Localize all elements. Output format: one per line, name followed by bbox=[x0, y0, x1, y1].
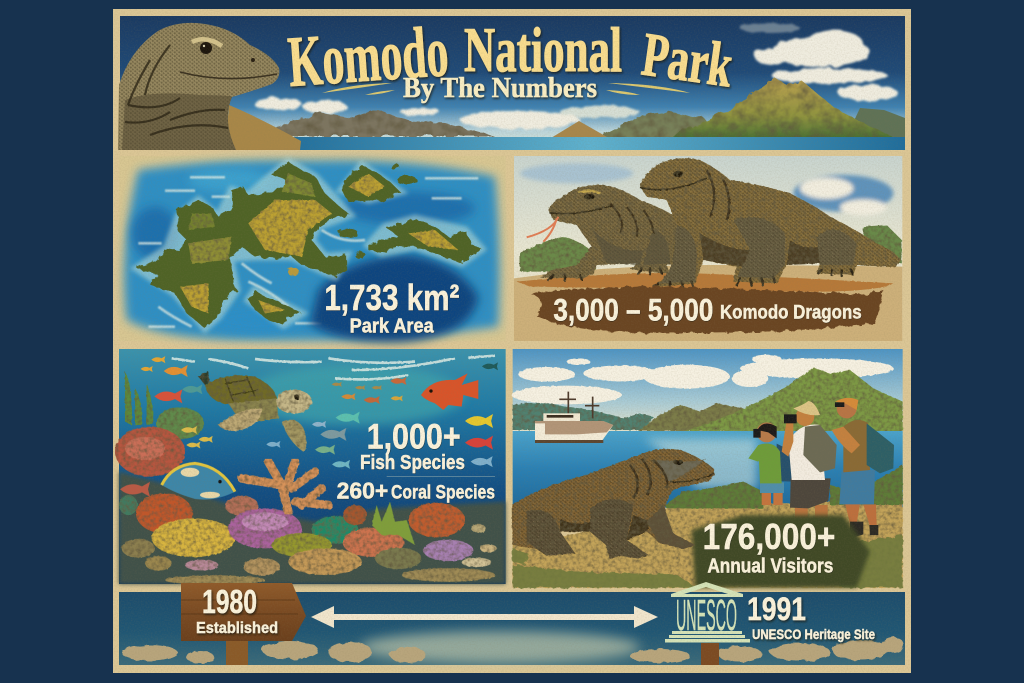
panel: marine life bbox=[115, 349, 506, 585]
sky tint and cloud bbox=[520, 163, 893, 215]
people group bbox=[748, 398, 894, 538]
green coral bbox=[156, 407, 204, 439]
green sea grass bbox=[372, 502, 415, 545]
small dragon bbox=[540, 184, 687, 278]
reef fish school bbox=[120, 356, 498, 497]
panel: timeline footer: UNESCO bbox=[676, 591, 737, 640]
tan rocks bbox=[288, 548, 362, 575]
header islet bbox=[546, 121, 614, 141]
orange right coral bbox=[408, 503, 465, 537]
ship bbox=[535, 392, 613, 443]
small orange coral bbox=[343, 505, 367, 525]
header tan headland bbox=[225, 105, 301, 150]
unesco post bbox=[701, 643, 719, 665]
large orange fish bbox=[421, 373, 478, 410]
title: National bbox=[464, 14, 622, 85]
left hills bbox=[513, 403, 653, 432]
title: Komodo bbox=[286, 11, 451, 102]
unesco temple icon bbox=[665, 582, 750, 642]
year 1980: 1980 bbox=[202, 583, 257, 620]
purple coral bbox=[228, 508, 302, 548]
lavender coral bbox=[423, 540, 473, 561]
coral species value: 260+ bbox=[337, 478, 388, 504]
salmon coral bbox=[343, 528, 404, 557]
large dragon limbs bbox=[660, 217, 857, 283]
band light patch bbox=[360, 631, 640, 663]
visitor count: 176,000+ bbox=[703, 516, 835, 557]
islets bbox=[288, 164, 417, 276]
dark belly bbox=[700, 233, 820, 267]
ground bbox=[513, 498, 903, 588]
main island bbox=[137, 162, 350, 328]
shrubs bbox=[665, 465, 903, 508]
header big mountain bbox=[662, 78, 903, 140]
right shrubs bbox=[863, 225, 902, 263]
right hills bbox=[638, 403, 763, 431]
visitor label: Annual Visitors bbox=[707, 556, 833, 578]
branching coral bbox=[242, 462, 328, 512]
panel: annual visitors bbox=[512, 349, 903, 588]
island highlights bbox=[180, 173, 458, 313]
foreground dragon limbs bbox=[560, 515, 650, 540]
header far right ridge bbox=[845, 108, 905, 140]
yellow coral bbox=[152, 518, 235, 557]
title: Park bbox=[638, 21, 737, 100]
reef water bbox=[119, 349, 506, 584]
surface ripples bbox=[172, 356, 495, 379]
text divider bbox=[387, 475, 495, 477]
light patch bbox=[245, 365, 465, 425]
yellow-green coral bbox=[272, 533, 332, 557]
foam streaks bbox=[138, 177, 478, 327]
panel: timeline footer bbox=[119, 582, 905, 665]
area label: Park Area bbox=[350, 316, 434, 338]
sandy ground bbox=[514, 265, 902, 341]
grass patches bbox=[513, 535, 903, 588]
subtitle flourishes bbox=[322, 83, 690, 95]
fish species label: Fish Species bbox=[360, 452, 465, 474]
coral bed bbox=[119, 472, 506, 584]
header left ridges bbox=[272, 110, 495, 136]
label shrub patch bbox=[692, 515, 870, 588]
panel: park area map bbox=[119, 156, 506, 342]
forked tongue bbox=[527, 217, 558, 242]
subtitle: By The Numbers bbox=[403, 72, 597, 104]
wooden sign 1980 bbox=[181, 583, 306, 641]
sea turtle bbox=[198, 371, 312, 452]
sea bbox=[513, 431, 903, 508]
sea sparkle bbox=[643, 438, 757, 488]
darker sea tones bbox=[132, 168, 475, 333]
dragon count: 3,000 – 5,000 bbox=[553, 292, 713, 327]
dragon panel sky bbox=[514, 156, 902, 341]
teal coral bbox=[312, 516, 358, 544]
shore stones bbox=[122, 637, 904, 663]
area value: 1,733 km² bbox=[324, 277, 459, 318]
double arrow bbox=[311, 606, 658, 628]
paper grain overlay bbox=[113, 9, 911, 673]
header sky bbox=[120, 16, 905, 150]
south island bbox=[248, 290, 302, 325]
unesco heritage label: UNESCO Heritage Site bbox=[752, 626, 875, 642]
ocean bbox=[124, 160, 499, 341]
corals bbox=[115, 407, 497, 585]
orange soil bbox=[517, 273, 893, 292]
timeline band bbox=[119, 592, 905, 665]
large dragon bbox=[548, 158, 901, 289]
orange brain coral bbox=[136, 493, 193, 533]
north-east island bbox=[342, 165, 400, 202]
large blue fish bbox=[162, 463, 235, 500]
visitor clouds bbox=[512, 355, 893, 404]
foreground dragon bbox=[512, 449, 714, 559]
title bbox=[286, 11, 737, 102]
sign post bbox=[226, 640, 248, 665]
mountain bbox=[685, 368, 903, 432]
year 1991: 1991 bbox=[747, 591, 806, 627]
seaweed bbox=[125, 372, 153, 425]
rose rock bbox=[225, 496, 258, 516]
visitor sky bbox=[513, 349, 903, 436]
coral species label: Coral Species bbox=[391, 482, 495, 503]
panel: dragon population bbox=[514, 156, 902, 341]
header dragon head bbox=[118, 23, 279, 150]
man in orange cap bbox=[832, 398, 894, 538]
man in hat bbox=[782, 401, 837, 518]
far hills bbox=[520, 237, 597, 272]
east island bbox=[368, 218, 482, 263]
deep water behind label bbox=[310, 255, 478, 342]
fish species value: 1,000+ bbox=[367, 417, 461, 456]
island halo bbox=[137, 162, 482, 328]
child visitor bbox=[748, 422, 793, 505]
label established: Established bbox=[196, 620, 278, 637]
dragon label: Komodo Dragons bbox=[720, 303, 862, 324]
claws bbox=[548, 268, 853, 289]
header water bbox=[280, 137, 905, 150]
header clouds bbox=[254, 23, 898, 129]
header right ridges bbox=[600, 112, 720, 140]
label soil patch bbox=[530, 287, 883, 333]
parchment frame bbox=[113, 9, 911, 673]
map paper bbox=[119, 156, 506, 341]
header banner bbox=[118, 11, 905, 150]
islands bbox=[137, 162, 482, 328]
red coral bbox=[115, 427, 185, 477]
